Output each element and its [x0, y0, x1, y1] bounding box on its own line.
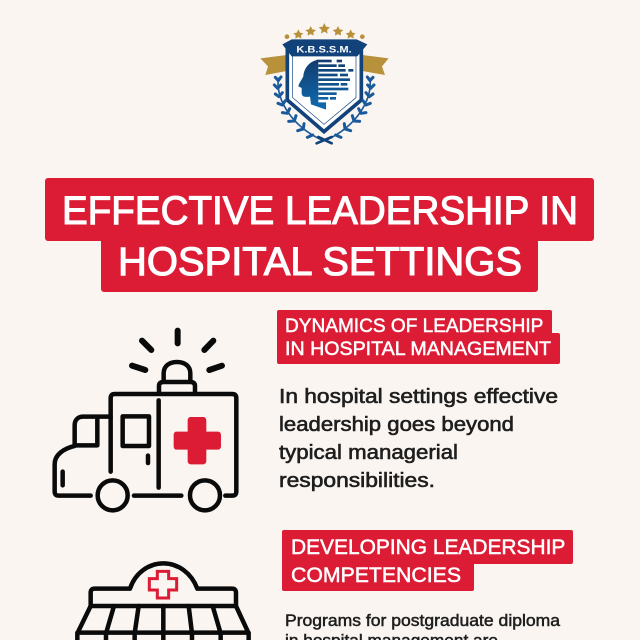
- section heading: developing leadership competencies: [282, 530, 573, 591]
- text block: leadership description: leadership goes beyond: [279, 414, 514, 436]
- section heading: dynamics of leadership: [277, 310, 560, 364]
- icon: hospital building: [77, 563, 249, 640]
- text block: programs description: Programs for postgraduate diploma: [285, 612, 561, 630]
- title text: HOSPITAL SETTINGS: [118, 240, 522, 284]
- logo head with data lines: [298, 60, 353, 110]
- logo banner: [282, 39, 367, 56]
- logo shield: [287, 48, 361, 132]
- ambulance wheels: [98, 480, 128, 510]
- ambulance cab: [75, 417, 111, 445]
- ambulance window and handle: [123, 416, 149, 446]
- siren rays: [132, 331, 222, 370]
- logo gold ribbons: [260, 55, 389, 75]
- logo laurel wreaths: [274, 77, 374, 143]
- text block: leadership description: In hospital settings effective: [279, 386, 558, 408]
- section heading: developing leadership competencies: COMPETENCIES: [291, 564, 461, 587]
- logo: K.B.S.S.M. shield crest: [260, 23, 389, 143]
- hospital red cross: [149, 571, 177, 598]
- title red highlight: [45, 178, 594, 292]
- logo: K.B.S.S.M. shield crest: K.B.S.S.M.: [296, 44, 352, 54]
- section heading: dynamics of leadership: IN HOSPITAL MANAGEMENT: [285, 338, 551, 360]
- text block: leadership description: typical managerial: [279, 442, 458, 464]
- red cross: [174, 417, 221, 464]
- siren dome: [164, 362, 190, 381]
- text block: leadership description: responsibilities.: [279, 470, 435, 492]
- section heading: developing leadership competencies: DEVELOPING LEADERSHIP: [291, 536, 565, 559]
- logo stars: [285, 23, 365, 39]
- section heading: dynamics of leadership: DYNAMICS OF LEADERSHIP: [285, 315, 543, 337]
- title text: EFFECTIVE LEADERSHIP IN: [62, 189, 578, 233]
- ambulance body: [111, 394, 236, 496]
- hospital roof: [91, 563, 236, 606]
- icon: ambulance: [55, 331, 236, 510]
- title: [45, 178, 594, 292]
- hospital awning: [77, 606, 249, 640]
